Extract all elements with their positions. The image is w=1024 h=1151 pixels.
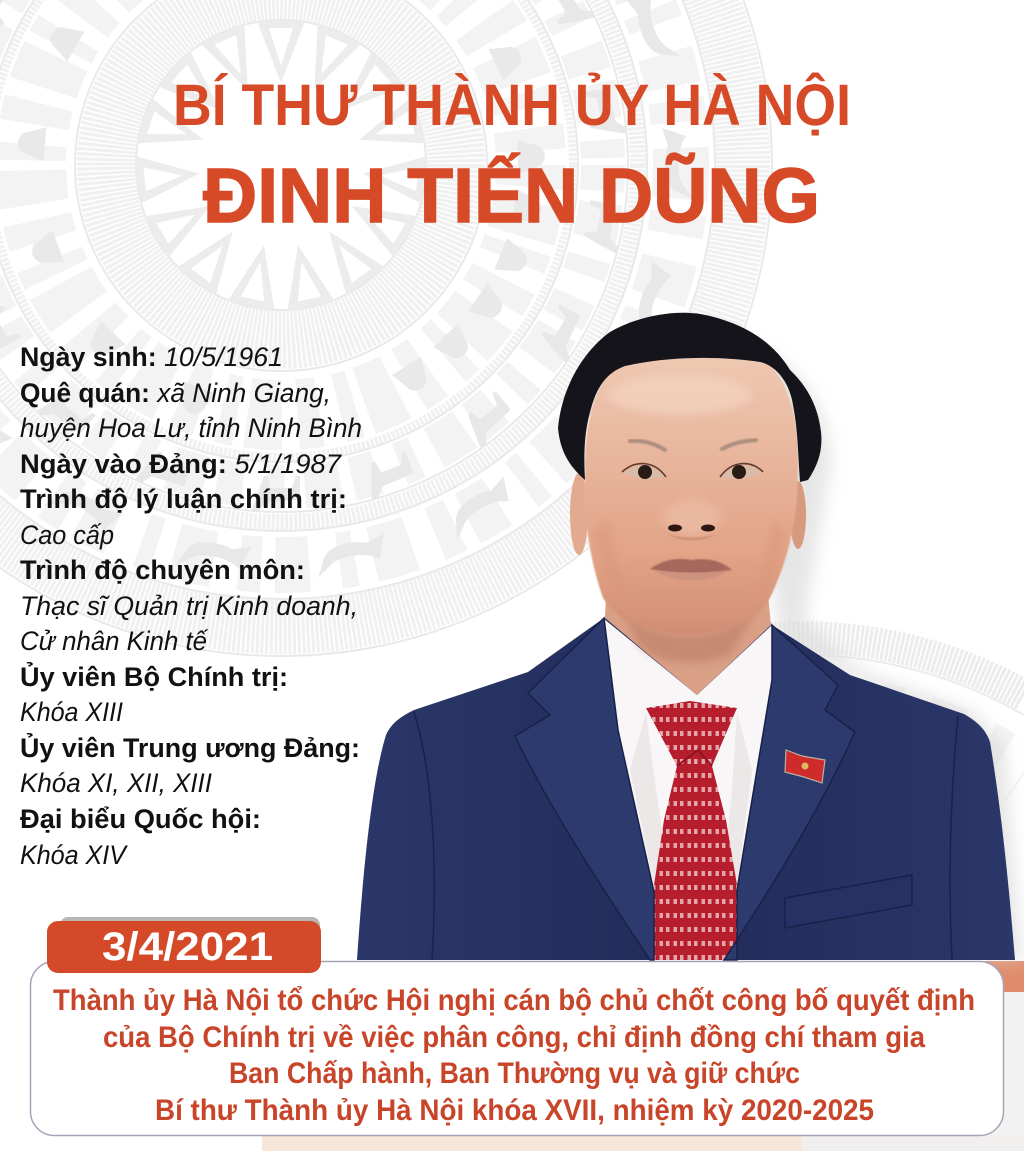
event description (53, 984, 975, 1127)
left ear (570, 473, 588, 555)
drum: bird figures (0, 0, 694, 578)
right eye (720, 464, 763, 479)
necktie (646, 701, 737, 960)
date tab shadow (60, 917, 320, 937)
hometown: huyện Hoa Lư, tỉnh Ninh Bình (20, 413, 362, 443)
breast pocket (785, 875, 912, 928)
biography text block (20, 342, 362, 870)
politburo member: Khóa XIII (20, 697, 123, 727)
birth date: Ngày sinh: 10/5/1961 (20, 342, 283, 372)
politburo member: Ủy viên Bộ Chính trị: (20, 660, 288, 692)
event description: Bí thư Thành ủy Hà Nội khóa XVII, nhiệm kỳ 2020-2025 (155, 1094, 874, 1127)
shirt (603, 618, 772, 960)
forehead highlight (608, 375, 752, 415)
hair (558, 313, 821, 482)
hometown (20, 378, 362, 443)
politburo member (20, 660, 288, 727)
nose (660, 499, 724, 540)
event description: Ban Chấp hành, Ban Thường vụ và giữ chức (229, 1057, 800, 1090)
face (585, 356, 798, 635)
hometown: Quê quán: xã Ninh Giang, (20, 378, 331, 408)
central committee member: Ủy viên Trung ương Đảng: (20, 731, 360, 763)
shirt shadow beside tie (630, 712, 752, 885)
professional level: Thạc sĩ Quản trị Kinh doanh, (20, 591, 358, 621)
national assembly deputy: Khóa XIV (20, 840, 129, 870)
central committee member (20, 731, 360, 798)
right eyebrow (722, 440, 756, 449)
left eyebrow (630, 441, 665, 450)
title line 1: BÍ THƯ THÀNH ỦY HÀ NỘI (173, 73, 851, 138)
political theory level: Trình độ lý luận chính trị: (20, 484, 347, 514)
right ear (790, 481, 806, 549)
central committee member: Khóa XI, XII, XIII (20, 768, 212, 798)
professional level: Cử nhân Kinh tế (20, 626, 209, 656)
party flag pin (785, 750, 825, 783)
right lapel (724, 625, 855, 960)
background: second drum arc (770, 637, 1024, 775)
left lapel (515, 618, 654, 960)
event panel (30, 917, 1004, 1136)
suit jacket (357, 618, 1015, 960)
mouth (650, 559, 732, 580)
portrait photo (357, 313, 1022, 965)
title (173, 73, 851, 239)
professional level: Trình độ chuyên môn: (20, 555, 305, 585)
date tab: 3/4/2021 (102, 925, 273, 969)
event description: của Bộ Chính trị về việc phân công, chỉ định đồng chí tham gia (103, 1021, 925, 1054)
left eye (622, 464, 666, 479)
drum: star triangles (135, 21, 427, 311)
cheek shading (594, 520, 786, 620)
neck shadow (622, 608, 758, 663)
background: bronze drum pattern (0, 0, 772, 656)
drum: deer figures (0, 0, 628, 512)
national assembly deputy (20, 804, 261, 870)
neck (605, 595, 771, 695)
drum: bell figures (17, 0, 545, 419)
soft shadow behind figure (740, 340, 1022, 960)
panel box (30, 962, 1004, 1136)
party join date: Ngày vào Đảng: 5/1/1987 (20, 449, 342, 479)
political theory level (20, 484, 347, 550)
national assembly deputy: Đại biểu Quốc hội: (20, 804, 261, 834)
background: lower band (262, 961, 1024, 1151)
professional level (20, 555, 358, 656)
political theory level: Cao cấp (20, 520, 114, 550)
title line 2: name: ĐINH TIẾN DŨNG (203, 152, 820, 239)
date tab (47, 921, 321, 973)
